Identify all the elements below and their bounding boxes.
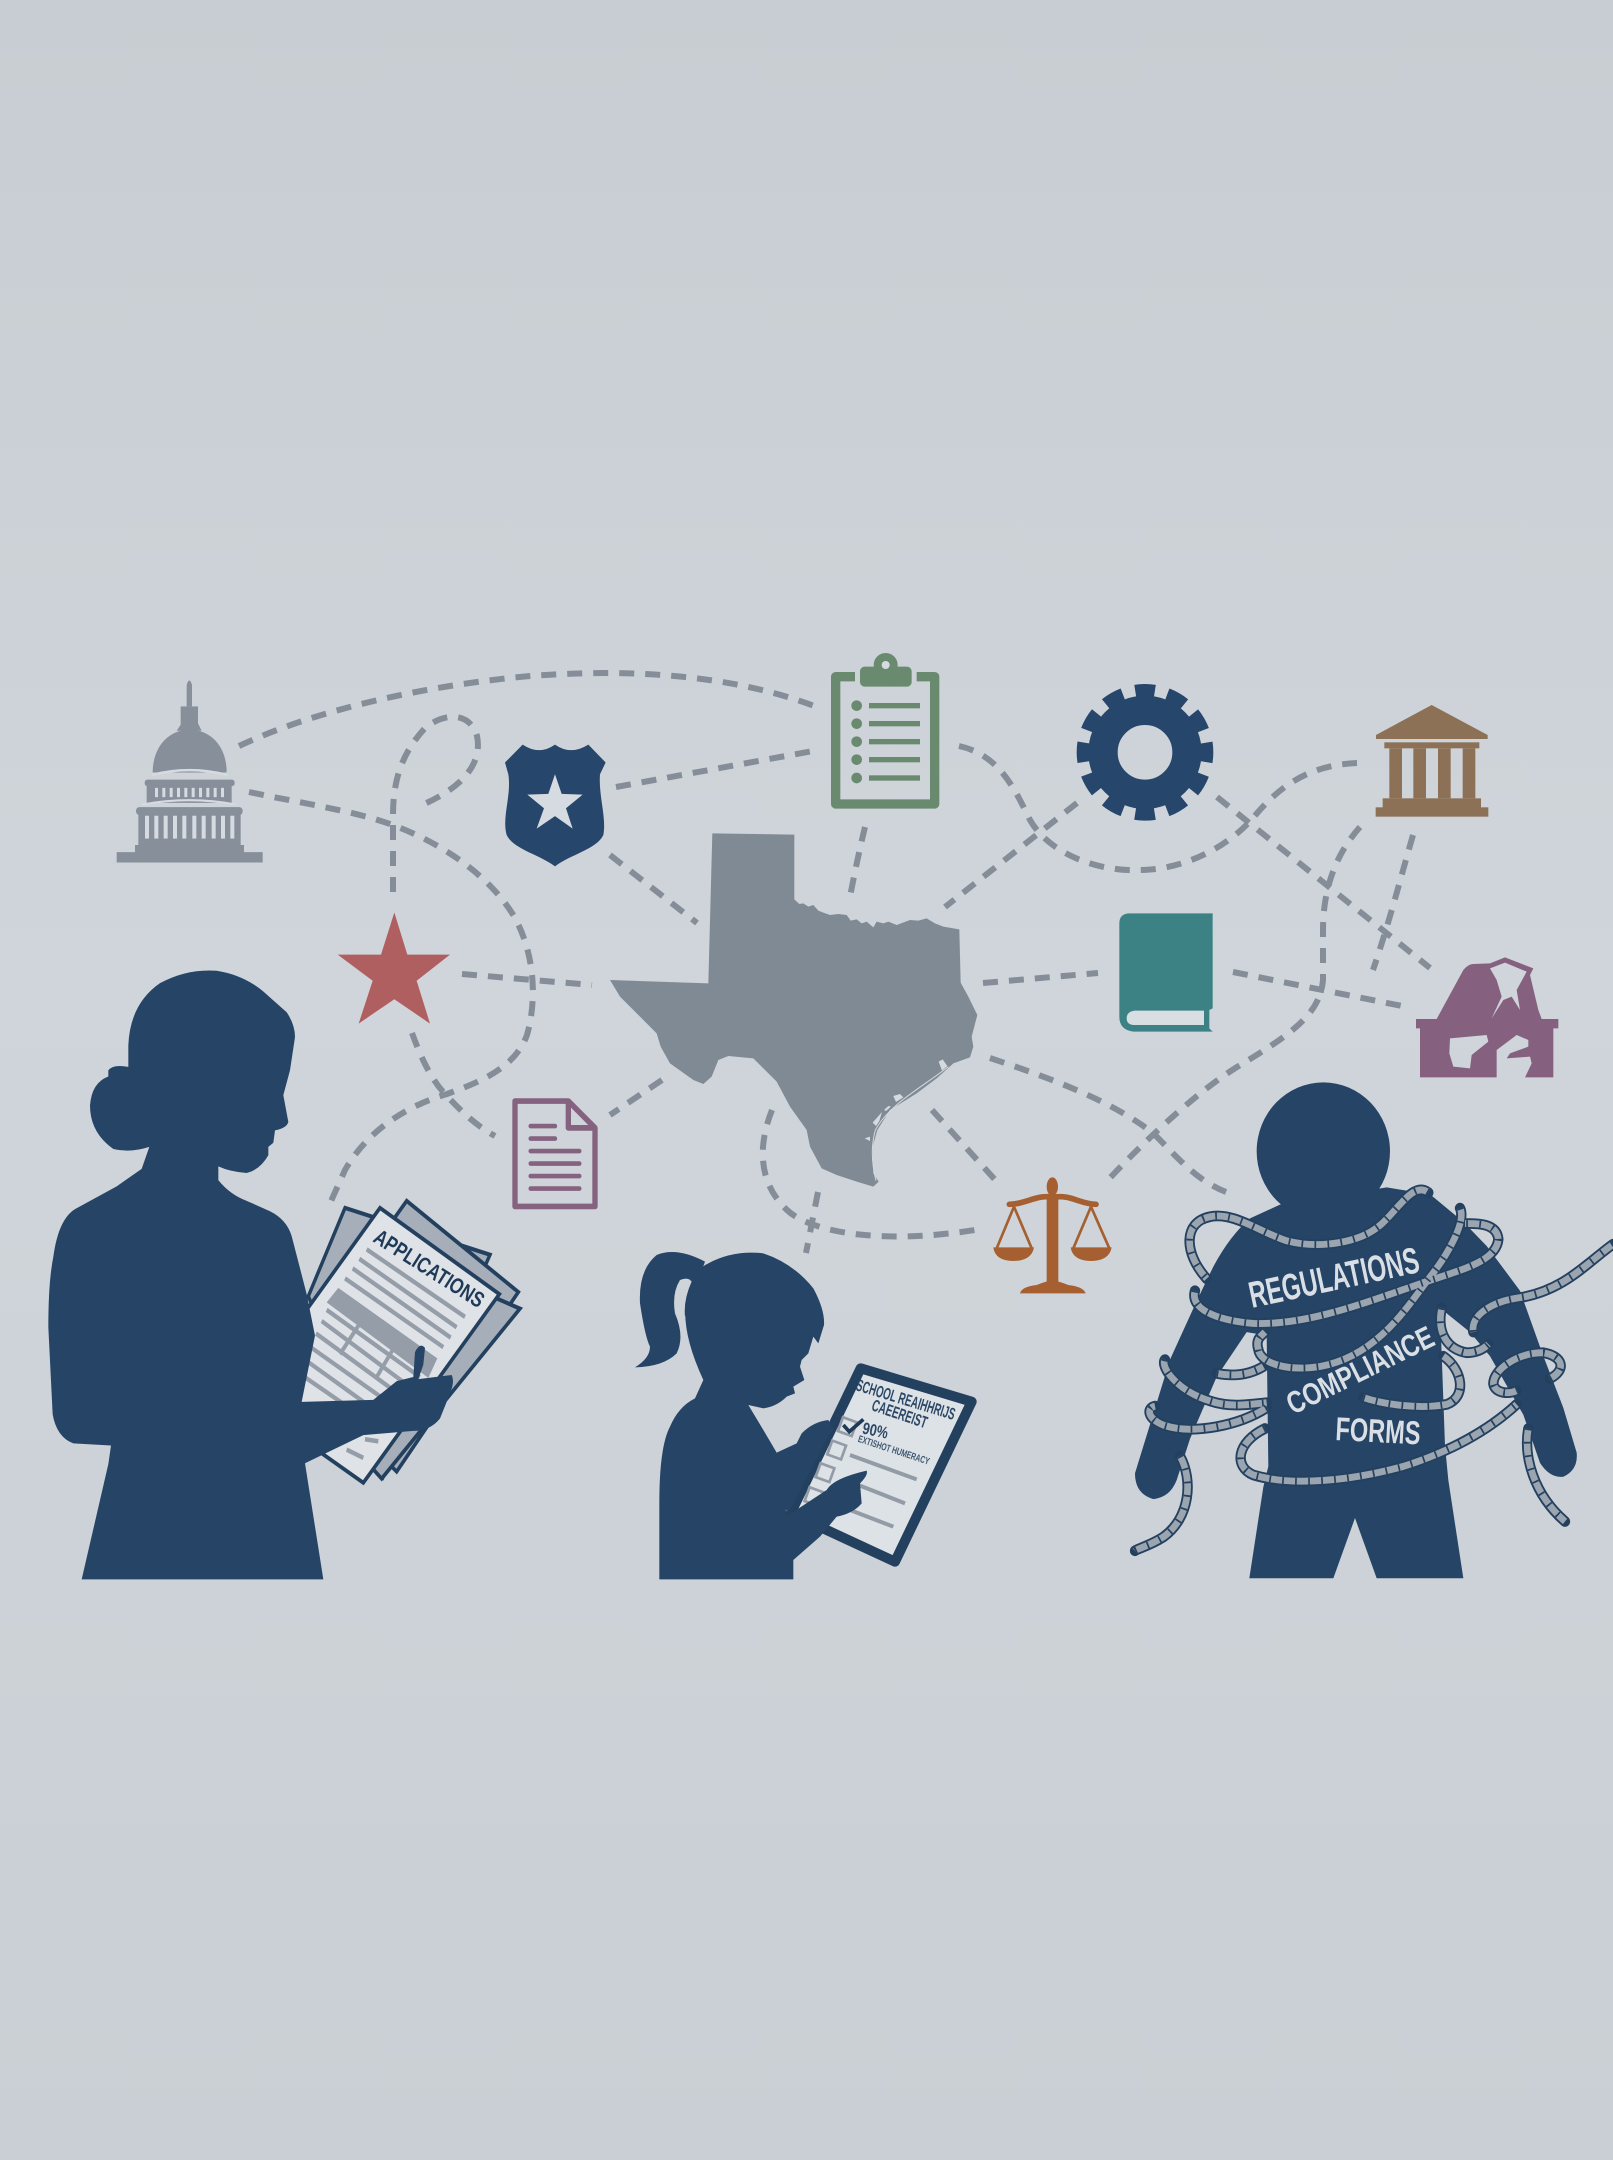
girl silhouette [659, 1253, 824, 1579]
woman silhouette [48, 970, 453, 1579]
icon: document [515, 1101, 595, 1206]
icon: red star [338, 912, 450, 1024]
tablet subheading: CAEEREIST [869, 1396, 930, 1432]
woman holding applications [48, 970, 520, 1579]
icon: clipboard checklist [836, 653, 935, 804]
percentage: 90% [861, 1419, 890, 1443]
hands [773, 1420, 867, 1560]
ponytail [635, 1252, 705, 1367]
icon: capitol building [117, 681, 263, 862]
check mark [843, 1419, 863, 1432]
figure and ropes [1135, 1082, 1613, 1578]
girl with tablet checklist [635, 1252, 972, 1579]
icon: bank building [1376, 705, 1488, 817]
label: compliance: COMPLIANCE [1281, 1319, 1440, 1421]
icon: gear [1084, 691, 1206, 813]
man tied up by rope [1135, 1082, 1613, 1578]
icon: police shield [505, 745, 606, 866]
label: forms: FORMS [1335, 1410, 1421, 1451]
tablet [791, 1368, 972, 1562]
tablet heading: SCHOOL REAIHHRIJS [854, 1376, 958, 1424]
dashed connector network [239, 673, 1430, 1253]
map of Texas [610, 833, 977, 1187]
checkboxes and lines [805, 1417, 917, 1527]
tablet small text: EXTISHOT HUMERACY [856, 1434, 931, 1468]
icon: scales of justice [993, 1177, 1112, 1293]
label: regulations: REGULATIONS [1245, 1239, 1423, 1316]
icon: teal book [1119, 913, 1213, 1032]
icon: purple damaged building [1416, 957, 1558, 1077]
stack of papers [243, 1201, 520, 1483]
label: applications: APPLICATIONS [369, 1224, 489, 1313]
